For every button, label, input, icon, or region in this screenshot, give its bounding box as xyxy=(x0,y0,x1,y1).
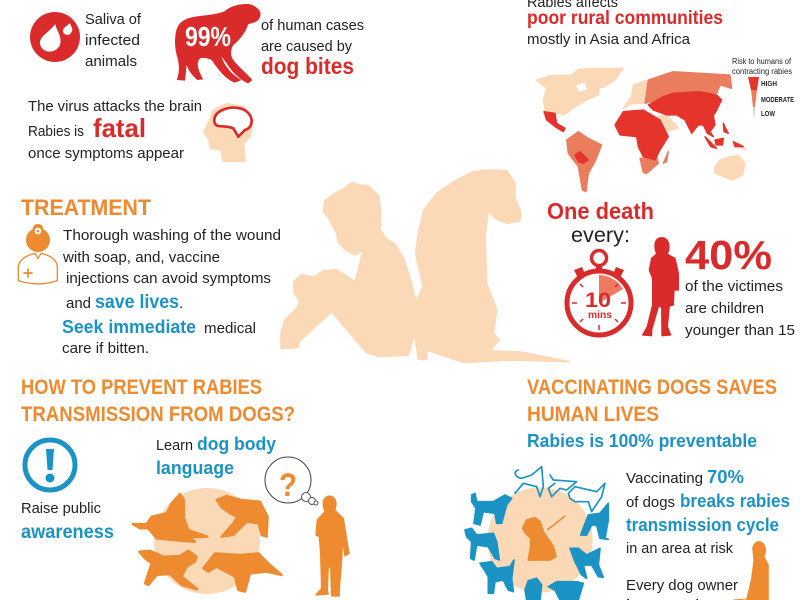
heading: vaccinating dogs: Rabies is 100% preventable xyxy=(527,431,757,451)
text: 40% of victims: 40% xyxy=(685,232,772,278)
text: 40% of victims: are children xyxy=(685,300,764,317)
heading: treatment: TREATMENT xyxy=(21,195,152,220)
text: treatment details: and xyxy=(66,295,91,312)
world map of rabies risk xyxy=(537,68,747,192)
map legend: LOW xyxy=(761,111,775,118)
map legend: contracting rabies xyxy=(732,67,792,76)
text: treatment details xyxy=(62,227,281,357)
map legend: HIGH xyxy=(761,81,777,88)
text: treatment details: care if bitten. xyxy=(62,340,149,357)
text: 40% of victims: of the victimes xyxy=(685,278,783,295)
heading: how to prevent: HOW TO PREVENT RABIES xyxy=(21,376,262,399)
text: raise public awareness xyxy=(21,500,114,543)
heading: vaccinating dogs: HUMAN LIVES xyxy=(527,403,659,426)
illustration: vaccinated dogs circle xyxy=(465,467,608,600)
icon: head with brain xyxy=(204,104,253,161)
text: virus attacks the brain: once symptoms appear xyxy=(28,145,184,162)
text: treatment details: . xyxy=(179,295,183,312)
text: learn dog body language xyxy=(156,434,276,478)
icon: doctor xyxy=(18,224,57,284)
text: poor rural communities: mostly in Asia and Africa xyxy=(527,31,691,48)
text: vaccinating 70% xyxy=(626,467,790,600)
thought bubble with question mark: ? xyxy=(279,467,297,503)
text: poor rural communities xyxy=(527,0,723,48)
text: learn dog body language: dog body xyxy=(197,434,276,454)
icon: stopwatch 10 mins: 10 xyxy=(585,289,611,312)
icon: saliva drops xyxy=(30,12,80,62)
text: vaccinating 70%: Vaccinating xyxy=(626,470,703,487)
text: vaccinating 70%: 70% xyxy=(707,467,744,487)
text: treatment details: with soap, and, vaccine xyxy=(62,249,220,266)
text: saliva of infected animals xyxy=(85,11,142,70)
icon: stopwatch 10 mins xyxy=(567,250,631,335)
heading: how to prevent: TRANSMISSION FROM DOGS? xyxy=(21,403,295,426)
ring of blue dogs xyxy=(465,493,608,600)
map legend: Risk to humans of xyxy=(732,57,792,66)
map legend: MODERATE xyxy=(761,97,794,104)
icon: red dog with 99% xyxy=(175,4,261,83)
text: saliva of infected animals: Saliva of xyxy=(85,11,142,28)
text: dog bites: of human cases xyxy=(261,17,364,34)
text: one death every: One death xyxy=(547,198,654,224)
text: raise public awareness: awareness xyxy=(21,522,114,543)
text: saliva of infected animals: infected xyxy=(85,32,140,49)
text: virus attacks the brain: The virus attacks the brain xyxy=(28,98,202,115)
icon: red child xyxy=(643,238,678,336)
text: 40% of victims: younger than 15 xyxy=(685,322,795,339)
text: one death every: every: xyxy=(571,224,630,247)
text: dog bites xyxy=(261,17,364,79)
vaccine syringe xyxy=(547,516,565,530)
text: 40% of victims xyxy=(685,232,795,339)
text: dog bites: are caused by xyxy=(261,38,352,55)
vaccinated orange dog xyxy=(523,518,556,560)
text: learn dog body language: Learn xyxy=(156,437,193,454)
icon: stopwatch 10 mins: mins xyxy=(588,310,612,321)
text: virus attacks the brain: fatal xyxy=(93,113,146,143)
text: treatment details: medical xyxy=(204,320,256,337)
text: vaccinating 70%: in an area at risk xyxy=(626,540,733,557)
text: treatment details: Thorough washing of the wound xyxy=(63,227,281,244)
text: learn dog body language: language xyxy=(156,458,234,478)
text: vaccinating 70%: Every dog owner xyxy=(626,577,738,594)
icon: red dog with 99%: 99% xyxy=(185,21,231,52)
text: saliva of infected animals: animals xyxy=(85,53,137,70)
thought bubble with question mark xyxy=(265,457,318,505)
icon: orange child xyxy=(316,496,349,596)
text: vaccinating 70%: transmission cycle xyxy=(626,515,779,535)
text: vaccinating 70%: breaks rabies xyxy=(680,491,790,511)
outlined blue dogs xyxy=(515,467,605,512)
map legend xyxy=(732,57,794,122)
text: virus attacks the brain xyxy=(28,98,202,162)
text: raise public awareness: Raise public xyxy=(21,500,101,517)
heading: vaccinating dogs xyxy=(527,376,777,451)
illustration: dog body language circle xyxy=(133,488,282,594)
text: poor rural communities: poor rural communities xyxy=(527,8,723,29)
text: treatment details: save lives xyxy=(95,292,179,313)
text: dog bites: dog bites xyxy=(261,53,354,79)
text: vaccinating 70%: of dogs xyxy=(626,494,675,511)
text: treatment details: Seek immediate xyxy=(62,317,196,337)
icon: woman walking dog xyxy=(733,542,768,600)
heading: how to prevent xyxy=(21,376,295,426)
text: treatment details: injections can avoid symptoms xyxy=(66,270,271,287)
text: virus attacks the brain: Rabies is xyxy=(28,123,84,140)
central silhouette: boy and dog back to back xyxy=(281,170,569,362)
text: one death every xyxy=(547,198,654,247)
icon: awareness exclamation xyxy=(25,440,75,490)
